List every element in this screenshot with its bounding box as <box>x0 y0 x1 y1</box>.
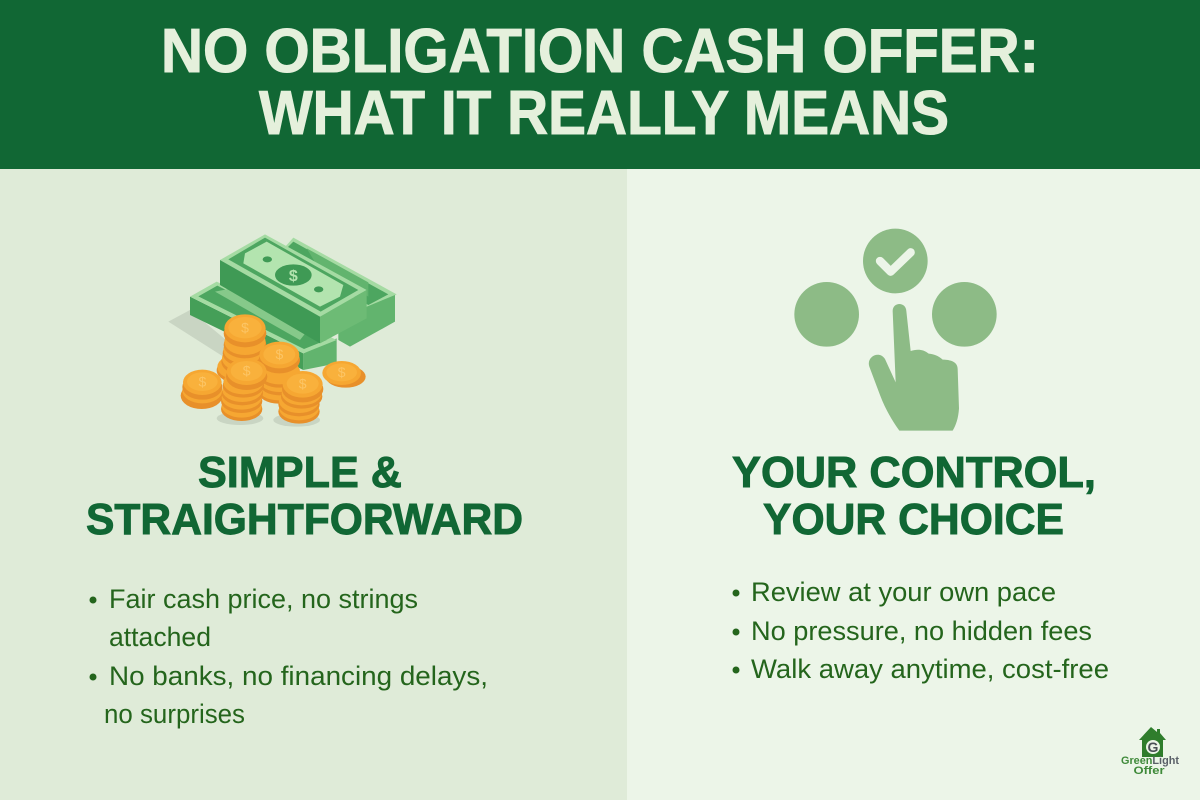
heading: simple and straightforward: STRAIGHTFORWARD <box>86 495 523 544</box>
header banner <box>0 0 1200 169</box>
title <box>161 17 1039 148</box>
right bullet list: Walk away anytime, cost-free <box>751 654 1109 684</box>
coin stack: middle: $ <box>275 346 283 362</box>
coin stack: left <box>181 370 223 409</box>
coin: single <box>322 361 366 388</box>
coin stack: rear: $ <box>241 319 249 335</box>
coin stack: front centre: $ <box>243 363 251 379</box>
heading: simple and straightforward <box>86 448 523 544</box>
right bullet list: No pressure, no hidden fees <box>751 616 1092 646</box>
panel: left background <box>0 169 627 800</box>
coin: single: $ <box>338 364 346 380</box>
heading: your control, your choice <box>732 448 1096 544</box>
panel: right background <box>627 169 1200 800</box>
icon: finger choosing checked option <box>794 229 997 431</box>
logo: GreenLight Offer: GreenLight <box>1121 755 1179 767</box>
right bullet list: Review at your own pace <box>751 577 1056 607</box>
right bullet list <box>732 577 1109 684</box>
coin stack: middle <box>258 342 300 404</box>
icon: cash and coins <box>168 234 397 427</box>
coin stack: front right <box>278 371 323 424</box>
logo: GreenLight Offer: Offer <box>1134 765 1165 777</box>
left bullet list: attached <box>109 622 211 652</box>
heading: your control, your choice: YOUR CONTROL, <box>732 448 1096 497</box>
title: NO OBLIGATION CASH OFFER: <box>161 17 1039 86</box>
coin stack: left: $ <box>198 373 206 389</box>
coin stack: front centre <box>221 358 267 421</box>
logo: GreenLight Offer: G <box>1148 739 1159 755</box>
left bullet list: Fair cash price, no strings <box>109 584 418 614</box>
left bullet list: No banks, no financing delays, <box>109 661 488 691</box>
coin stack: rear <box>217 314 266 384</box>
heading: your control, your choice: YOUR CHOICE <box>763 495 1064 544</box>
logo: GreenLight Offer <box>1121 727 1179 777</box>
icon: cash and coins: $ <box>289 268 298 285</box>
heading: simple and straightforward: SIMPLE & <box>198 448 402 497</box>
title: WHAT IT REALLY MEANS <box>259 79 949 148</box>
coin stack: front right: $ <box>299 375 307 391</box>
left bullet list <box>90 584 488 729</box>
left bullet list: no surprises <box>104 699 245 729</box>
